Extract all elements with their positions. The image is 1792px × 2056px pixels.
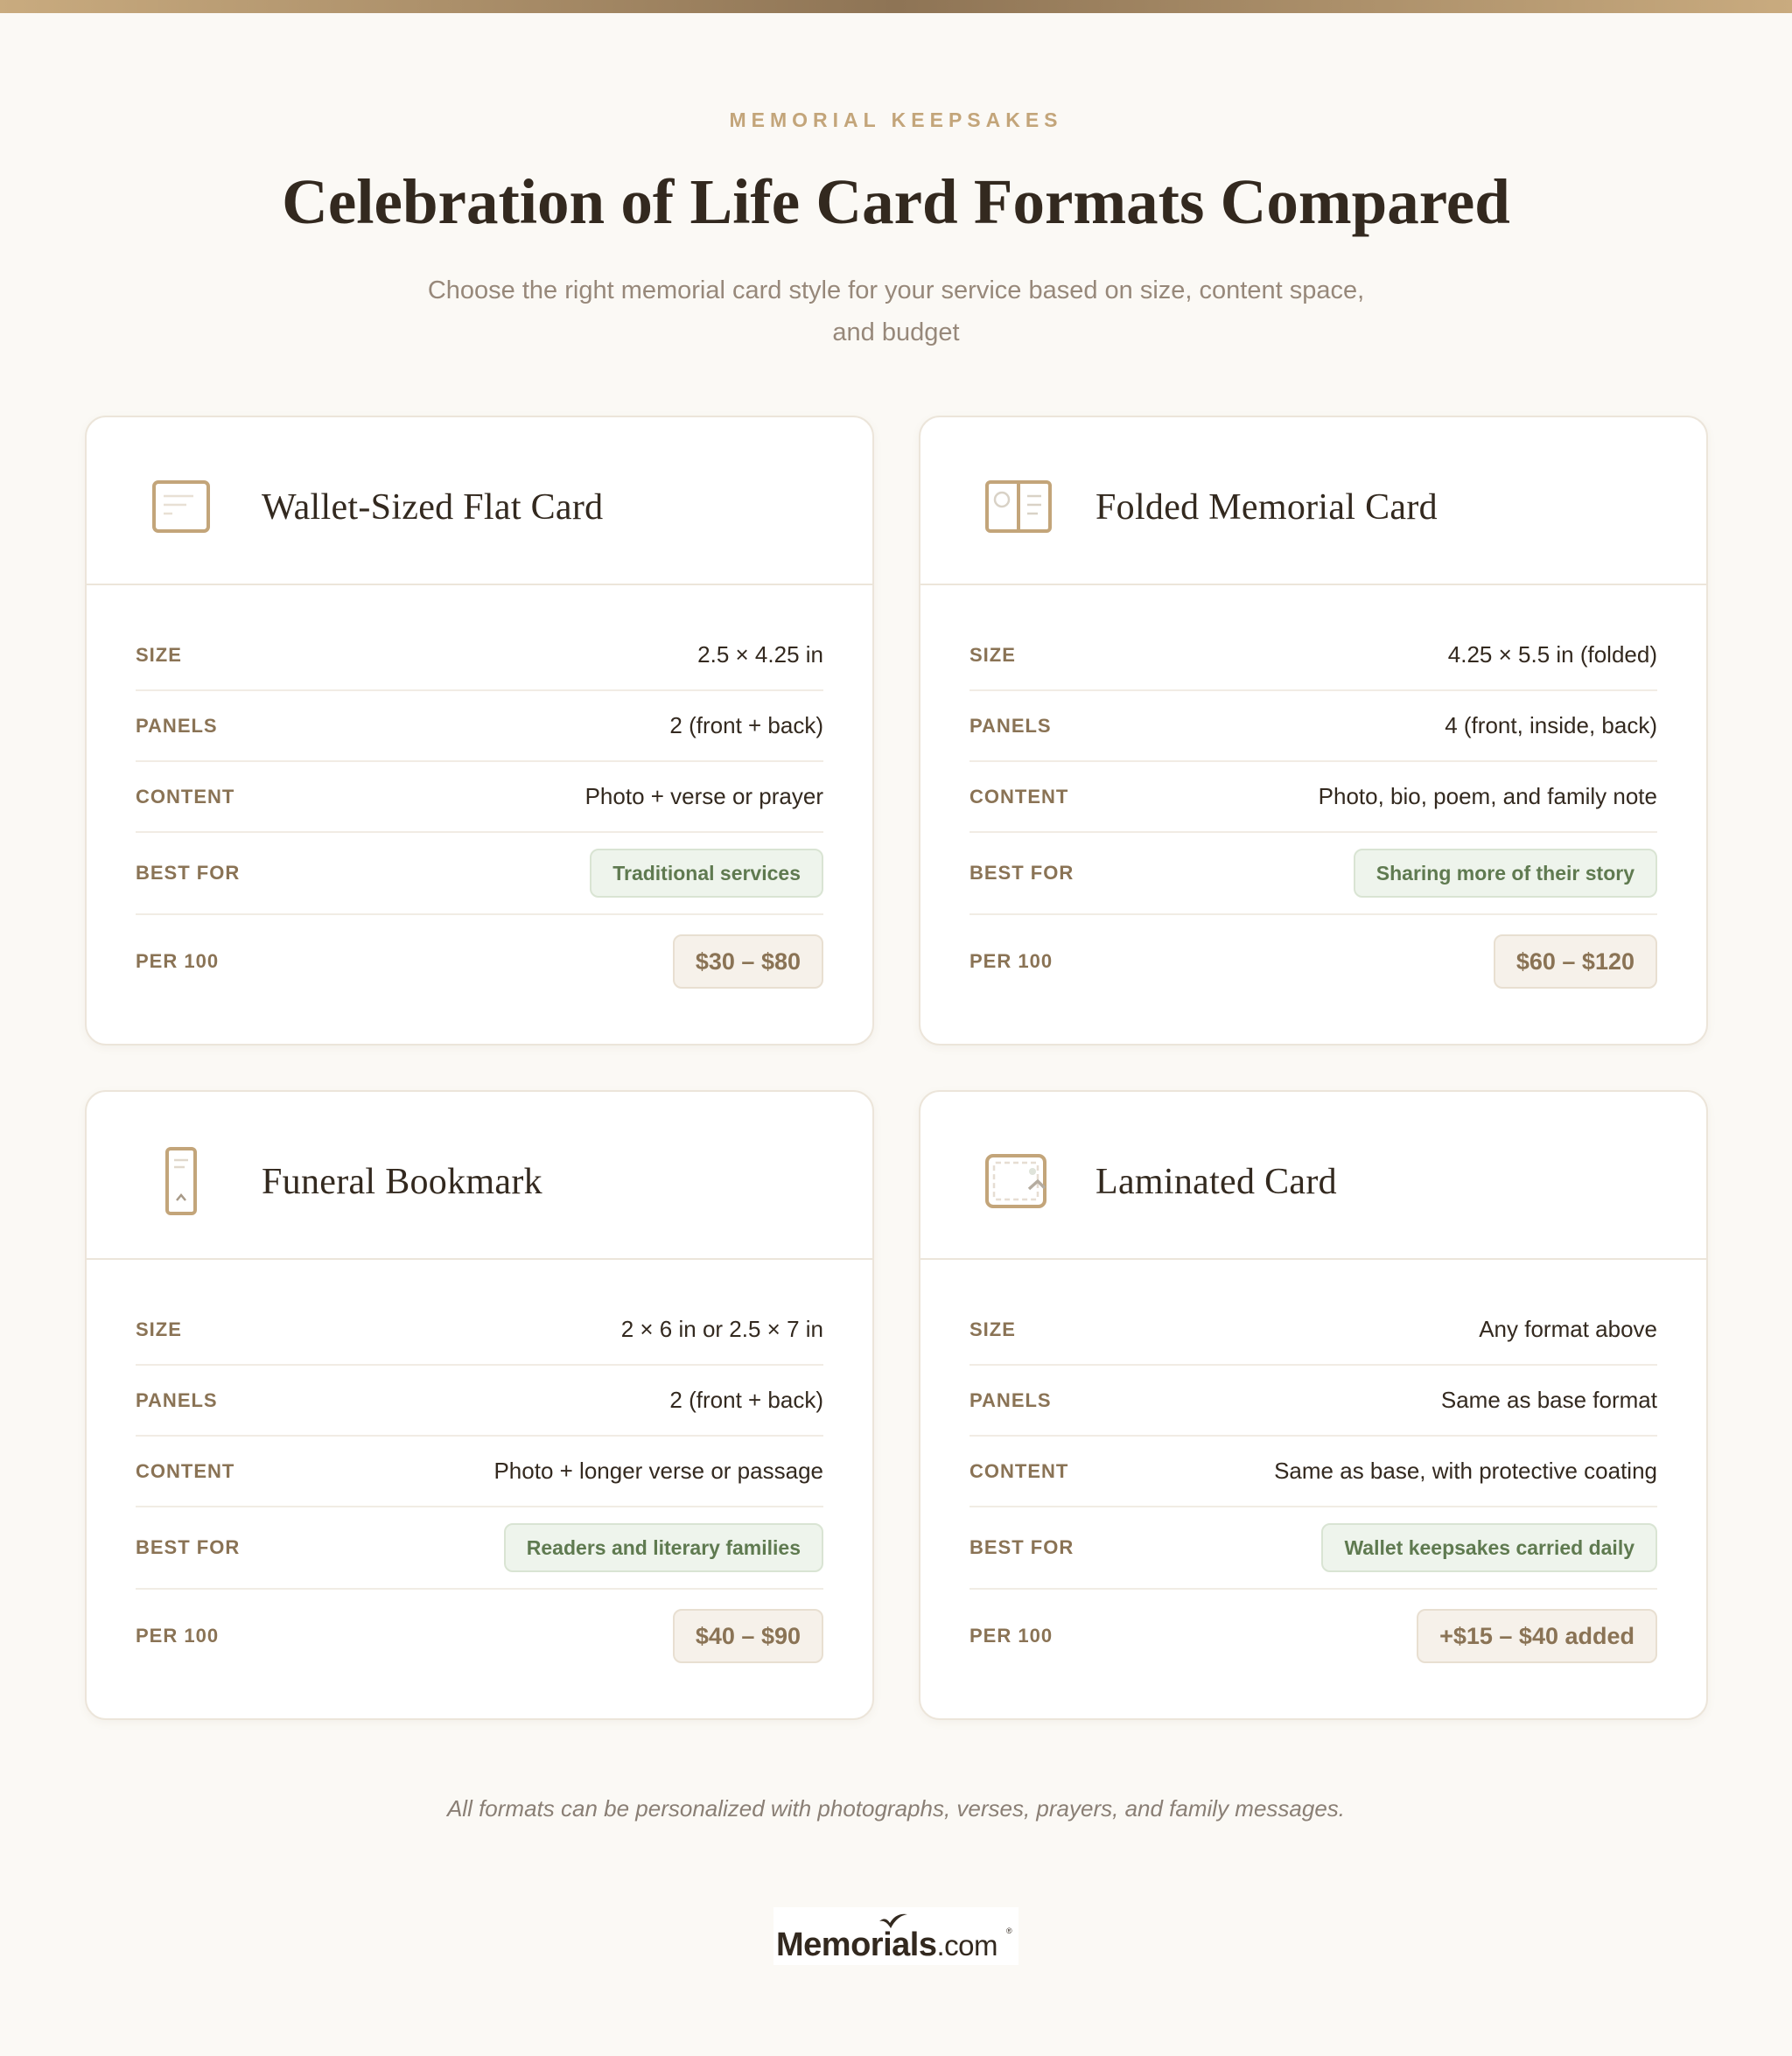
rows: wallet: PER 100 — [136, 950, 219, 972]
rows: wallet: PANELS — [136, 714, 218, 737]
rows: folded: Photo, bio, poem, and family note — [1319, 783, 1657, 809]
rows: bookmark: 2 × 6 in or 2.5 × 7 in — [621, 1316, 823, 1342]
rows: laminated: BEST FOR — [970, 1536, 1074, 1558]
rows: folded: 4.25 × 5.5 in (folded) — [1448, 641, 1657, 668]
rows: wallet: BEST FOR — [136, 862, 240, 884]
rows: wallet: 2 (front + back) — [669, 712, 823, 738]
card header: wallet — [87, 417, 872, 585]
card header: folded: Folded Memorial Card — [1096, 487, 1438, 528]
card header: laminated: Laminated Card — [1096, 1162, 1337, 1202]
rows: folded: BEST FOR — [970, 862, 1074, 884]
title: Celebration of Life Card Formats Compared — [282, 166, 1510, 237]
rows: folded: PER 100 — [970, 950, 1053, 972]
rows: wallet: Photo + verse or prayer — [585, 783, 823, 809]
rows: bookmark: Readers and literary families — [527, 1536, 801, 1559]
rows: wallet: CONTENT — [136, 786, 234, 807]
rows: folded: $60 – $120 — [1516, 948, 1634, 975]
rows: laminated: PANELS — [970, 1389, 1052, 1410]
rows: folded: SIZE — [970, 644, 1016, 665]
rows: bookmark: PER 100 — [136, 1625, 219, 1647]
rows: laminated: Same as base format — [1441, 1387, 1657, 1413]
rows: bookmark: SIZE — [136, 1318, 182, 1340]
logo: Memorials.com — [776, 1927, 998, 1963]
rows: laminated: Wallet keepsakes carried daily — [1344, 1536, 1634, 1559]
card header: folded — [920, 417, 1706, 585]
rows: wallet: $30 – $80 — [696, 948, 801, 975]
logo — [774, 1907, 1018, 1965]
rows: bookmark: $40 – $90 — [696, 1623, 801, 1649]
card header: bookmark: Funeral Bookmark — [262, 1162, 542, 1202]
panel: funeral bookmark — [85, 1090, 874, 1720]
eyebrow: MEMORIAL KEEPSAKES — [729, 108, 1063, 131]
rows: laminated: CONTENT — [970, 1459, 1068, 1482]
panel: folded memorial card — [919, 416, 1708, 1045]
rows: laminated: PER 100 — [970, 1625, 1053, 1647]
rows: laminated: SIZE — [970, 1318, 1016, 1340]
logo: ® — [1006, 1927, 1012, 1935]
rows: bookmark — [136, 1316, 823, 1663]
rows: bookmark: 2 (front + back) — [669, 1387, 823, 1413]
footer note: All formats can be personalized with photographs, verses, prayers, and family messages. — [447, 1795, 1345, 1822]
panel: laminated card — [919, 1090, 1708, 1720]
card header: laminated — [920, 1092, 1706, 1260]
rows: laminated: Same as base, with protective coating — [1274, 1458, 1657, 1484]
rows: folded — [970, 641, 1657, 989]
rows: bookmark: PANELS — [136, 1389, 218, 1410]
rows: wallet: SIZE — [136, 644, 182, 665]
rows: laminated — [970, 1316, 1657, 1663]
rows: folded: CONTENT — [970, 786, 1068, 807]
card header: bookmark — [87, 1092, 872, 1260]
rows: folded: PANELS — [970, 714, 1052, 737]
rows: bookmark: BEST FOR — [136, 1536, 240, 1558]
rows: folded: 4 (front, inside, back) — [1445, 712, 1657, 738]
subtitle: Choose the right memorial card style for your service based on size, content space, and budget — [428, 276, 1364, 346]
panel: wallet-sized flat card — [85, 416, 874, 1045]
rows: laminated: +$15 – $40 added — [1439, 1623, 1634, 1649]
rows: folded: Sharing more of their story — [1376, 862, 1634, 885]
rows: wallet: 2.5 × 4.25 in — [697, 641, 823, 668]
rows: wallet — [136, 641, 823, 989]
rows: wallet: Traditional services — [612, 862, 801, 885]
rows: laminated: Any format above — [1479, 1316, 1657, 1342]
card header: wallet: Wallet-Sized Flat Card — [262, 487, 603, 528]
rows: bookmark: Photo + longer verse or passage — [494, 1458, 823, 1484]
rows: bookmark: CONTENT — [136, 1459, 234, 1482]
